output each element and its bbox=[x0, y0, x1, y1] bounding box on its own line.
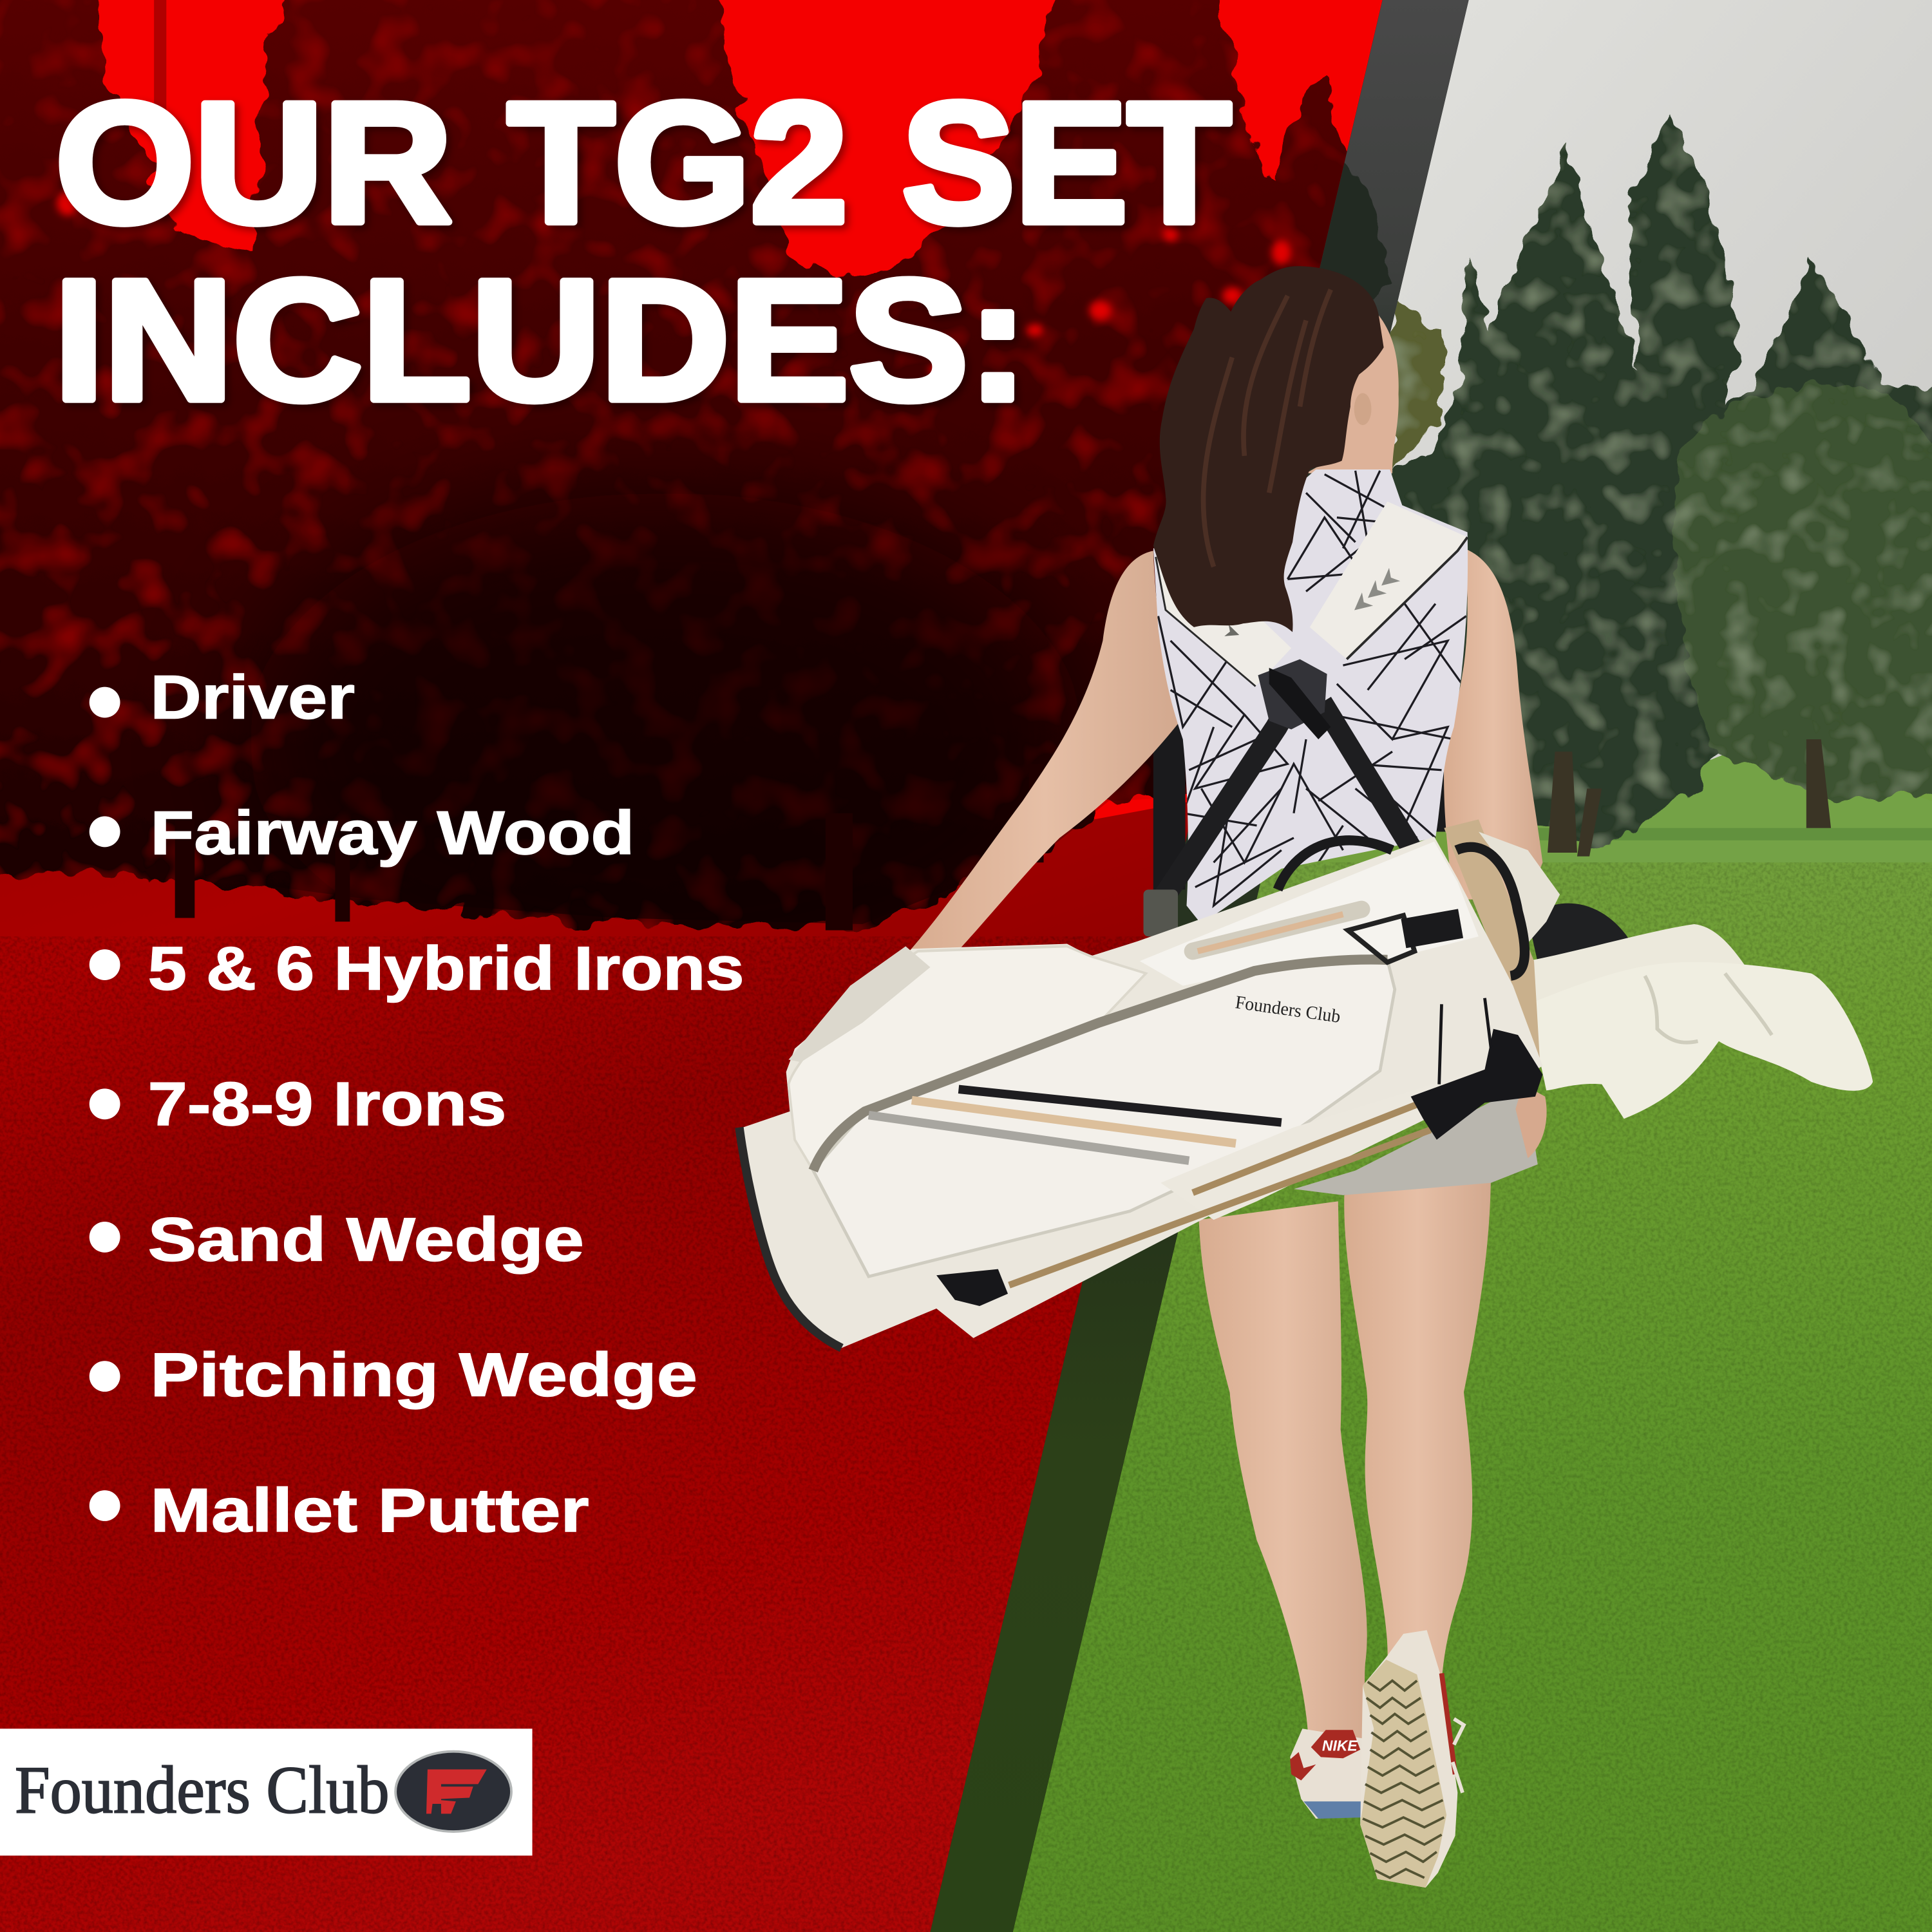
carabiner clip bbox=[1348, 916, 1414, 962]
small zip pocket bbox=[1193, 909, 1361, 951]
diagonal gray band bbox=[912, 0, 1491, 1932]
pale trunk against sky bbox=[154, 0, 166, 111]
upper top panel bbox=[1140, 842, 1479, 986]
shoulder strap crossing webbing bbox=[1160, 696, 1412, 902]
right leg bbox=[1344, 1171, 1491, 1682]
stripes bbox=[959, 1089, 1282, 1122]
golf stand bag bbox=[735, 819, 1560, 1348]
hand on right side bbox=[1515, 1084, 1547, 1158]
right arm bbox=[1444, 548, 1542, 900]
dark driver head bbox=[1528, 904, 1629, 973]
logo panel: Founders Club bbox=[0, 1728, 533, 1855]
illustration: golfer carrying bag bbox=[735, 266, 1873, 1888]
stand tube panel bbox=[1160, 1072, 1484, 1220]
item: Hybrid Irons: 5 & 6 Hybrid Irons bbox=[148, 934, 744, 1003]
strap junction plate bbox=[1258, 659, 1327, 730]
title word: SET: SET bbox=[902, 67, 1231, 258]
hair with ponytail bbox=[1153, 266, 1384, 632]
upper headcover bbox=[1528, 924, 1747, 1023]
diagonal zipper bbox=[813, 960, 1387, 1171]
bright red gaps in the canopy bbox=[57, 191, 1291, 376]
back vertical straps bbox=[1153, 705, 1456, 889]
bullet: Pitching Wedge bbox=[90, 1361, 120, 1392]
left shoe: NIKE bbox=[1322, 1738, 1358, 1754]
item: Pitching Wedge: Pitching Wedge bbox=[150, 1341, 697, 1410]
lower headcover bbox=[1528, 962, 1873, 1119]
bullet: Sand Wedge bbox=[90, 1222, 120, 1253]
title word: TG2: TG2 bbox=[507, 67, 848, 258]
shirt geometric line pattern bbox=[1158, 471, 1466, 905]
title heading bbox=[54, 67, 1231, 436]
red swoosh stripe bbox=[1442, 1673, 1455, 1774]
skirt bbox=[1294, 1084, 1538, 1195]
embroidered bag logo: Founders Club bbox=[1234, 992, 1342, 1027]
bullet: 7-8-9 Irons bbox=[90, 1088, 120, 1119]
shoulder strap pads bbox=[1156, 502, 1468, 687]
left shoe bbox=[1290, 1728, 1371, 1819]
bullet: Mallet Putter bbox=[90, 1490, 120, 1521]
gold stand legs bbox=[1009, 1086, 1465, 1285]
headcovers and clubs bbox=[1528, 904, 1873, 1119]
logo emblem bbox=[395, 1752, 511, 1832]
nike swoosh bbox=[1290, 1752, 1316, 1781]
dark red tree silhouettes bbox=[0, 0, 1399, 931]
item: 7-8-9 Irons: 7-8-9 Irons bbox=[148, 1070, 506, 1139]
grain on grass bbox=[0, 936, 1232, 1932]
black divider handle bbox=[1456, 847, 1524, 976]
bulleted list of clubs bbox=[90, 663, 744, 1545]
tree trunks bbox=[175, 764, 1044, 931]
side pouch bbox=[1479, 831, 1560, 949]
distant lawn bbox=[1528, 754, 1932, 862]
chevrons bbox=[1349, 568, 1400, 617]
right shoe bbox=[1360, 1630, 1464, 1888]
tread sole bbox=[1360, 1660, 1446, 1888]
tree trunks bbox=[1548, 739, 1831, 857]
bullet: Fairway Wood bbox=[90, 817, 120, 847]
panel: right photo background with sky, trees and grass bbox=[986, 0, 1932, 1932]
bottom base rim bbox=[739, 1128, 842, 1348]
bullet: Hybrid Irons bbox=[90, 949, 120, 980]
item: Fairway Wood: Fairway Wood bbox=[150, 799, 634, 867]
deep shadow under canopy bbox=[247, 493, 1084, 986]
title word: OUR: OUR bbox=[55, 67, 452, 258]
item: Mallet Putter: Mallet Putter bbox=[150, 1476, 589, 1545]
black leg hardware bbox=[1411, 1029, 1542, 1140]
logo wordmark: Founders Club bbox=[15, 1752, 390, 1827]
laces bbox=[1453, 1719, 1464, 1793]
left arm bbox=[909, 551, 1180, 971]
title line two: INCLUDES: bbox=[54, 245, 1028, 436]
sleeveless patterned shirt bbox=[1146, 462, 1479, 931]
blue shoe sole bbox=[1303, 1801, 1365, 1819]
tread chevrons bbox=[1363, 1681, 1444, 1878]
bag shell bbox=[735, 837, 1542, 1348]
black bag handle bbox=[1278, 840, 1392, 889]
ear bbox=[1354, 393, 1371, 425]
item: Sand Wedge: Sand Wedge bbox=[148, 1205, 584, 1274]
glove and hand bbox=[788, 946, 931, 1062]
tree shadow on lawn bbox=[1528, 828, 1932, 840]
tan mesh divider bbox=[1444, 819, 1540, 1066]
panel: red duotone fairway background bbox=[0, 0, 1399, 1932]
large front pocket bbox=[813, 960, 1395, 1276]
upper pocket bbox=[788, 946, 1146, 1171]
item: Driver: Driver bbox=[150, 663, 355, 732]
conifer and deciduous trees bbox=[1392, 116, 1932, 850]
bullet: Driver bbox=[90, 687, 120, 717]
neck and face bbox=[1306, 316, 1399, 473]
left leg bbox=[1199, 1201, 1370, 1756]
red ground bbox=[0, 802, 1188, 1932]
grass bbox=[986, 788, 1932, 1932]
grass grain bbox=[986, 862, 1932, 1932]
buckle hardware bbox=[1144, 889, 1178, 936]
